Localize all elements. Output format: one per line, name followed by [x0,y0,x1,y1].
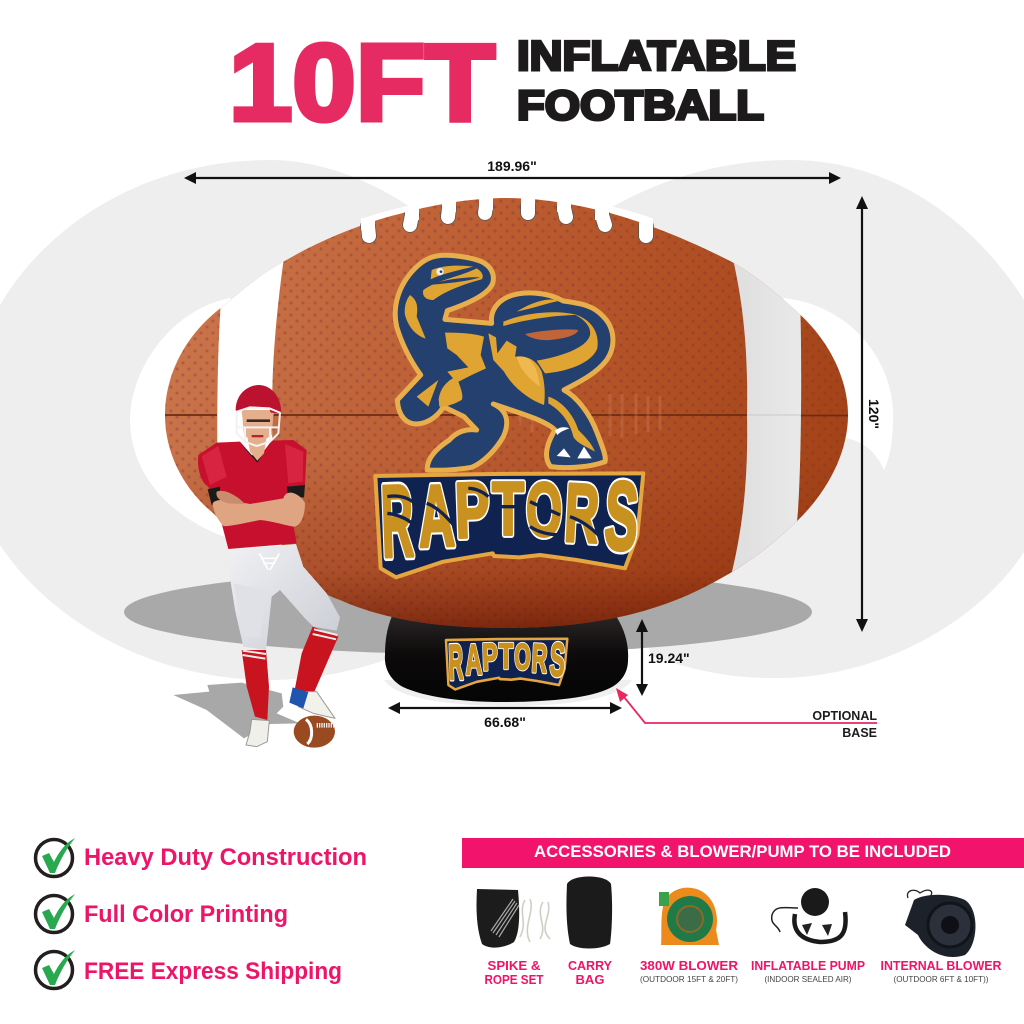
label: carry bag [568,958,612,987]
label: spike and rope set [484,958,544,987]
inflatable base [384,616,632,706]
base logo letter outlines: S [549,633,566,686]
base logo letter outlines: R [531,635,548,681]
label: internal blower: INTERNAL BLOWER [880,958,1002,973]
tail markings [537,314,598,373]
neck marking [405,295,426,339]
accessories header [462,838,1024,868]
accessories header: ACCESSORIES & BLOWER/PUMP TO BE INCLUDED [534,842,951,861]
feature list [36,838,367,988]
base logo letter outlines: P [481,635,498,679]
player shadow [173,683,300,738]
panel: accessories [462,838,1024,987]
label: carry bag: BAG [576,972,604,987]
dimension: height 120 [856,196,882,632]
callout: optional base [616,688,877,740]
icon: spike and rope set [477,889,550,948]
wordmark stripes [387,488,598,535]
football player [173,385,340,748]
label: inflatable pump: (INDOOR SEALED AIR) [764,974,852,984]
dinosaur silhouette [395,255,613,470]
thigh marking [488,333,545,405]
logo: raptor mascot [395,255,613,470]
dimension: height 120: 120" [866,399,882,429]
callout: optional base: OPTIONAL [812,709,877,723]
hind leg marking [548,397,595,452]
face mask [237,407,280,446]
feature: full color [36,894,288,932]
label: internal blower [880,958,1002,984]
wordmark letter fills: S [602,463,641,571]
label: 380W blower: 380W BLOWER [640,958,739,973]
inflatable football [160,195,855,635]
base logo letter fills: O [514,637,531,678]
callout: optional base: BASE [842,726,877,740]
title [229,22,796,144]
feature: full color: Full Color Printing [84,901,288,928]
background blobs [0,160,1024,680]
dimension: width 189.96 [184,158,841,184]
sleeves bands [208,485,305,505]
dimension: width 189.96: 189.96" [487,158,537,174]
title: inflatable: INFLATABLE [517,32,796,79]
label: inflatable pump: INFLATABLE PUMP [751,958,865,973]
base logo letter fills: R [531,635,548,681]
laces [368,198,646,236]
wordmark letter fills [379,463,641,579]
wordmark letter fills: P [454,467,491,555]
wordmark letter outlines: A [417,468,456,566]
wordmark letter outlines [379,463,641,579]
wordmark letter outlines: R [562,467,601,561]
feature: heavy duty [36,838,367,876]
ground shadow [124,570,812,654]
head [242,410,274,445]
wordmark letter outlines: O [526,469,562,553]
wordmark letter fills: R [562,467,601,561]
head markings [423,268,483,300]
base logo letter outlines: T [499,635,513,677]
dimension: base width 66.68 [388,702,622,730]
base logo letter fills [448,633,566,691]
base logo letter fills: R [448,636,464,691]
feature: heavy duty: Heavy Duty Construction [84,844,367,871]
crossed arms [213,493,305,527]
wordmark letter outlines: T [492,466,524,551]
wordmark letter outlines: P [454,467,491,555]
label: carry bag: CARRY [568,958,612,973]
pants [229,544,340,650]
label: inflatable pump [751,958,865,984]
base logo [446,633,567,691]
wordmark letter fills: R [379,463,415,579]
icon: internal blower [905,890,976,957]
socks [242,650,269,720]
chest marking [445,333,486,383]
base logo letter outlines [448,633,566,691]
feature: free shipping [36,950,342,988]
label: spike and rope set: ROPE SET [484,972,544,987]
base logo letter fills: S [549,633,566,686]
label: spike and rope set: SPIKE & [488,958,540,973]
seam [165,414,848,416]
title: football: FOOTBALL [517,82,764,128]
label: internal blower: (OUTDOOR 6FT & 10FT)) [894,974,989,984]
dimension: base width 66.68: 66.68" [484,714,526,730]
helmet [236,385,281,413]
wordmark letter outlines: R [379,463,415,579]
wordmark letter fills: O [526,469,562,553]
icon: inflatable pump [772,888,846,942]
dimension: base height 19.24: 19.24" [648,650,690,666]
icon: carry bag [566,876,612,948]
logo: RAPTORS wordmark [375,463,643,579]
small football [294,716,335,748]
base logo letter fills: P [481,635,498,679]
right stripe [730,255,801,580]
base logo letter fills: A [465,636,483,684]
label: 380W blower [640,958,739,984]
label: 380W blower: (OUTDOOR 15FT & 20FT) [640,974,738,984]
feature: free shipping: FREE Express Shipping [84,958,342,985]
base logo letter outlines: R [448,636,464,691]
base logo letter fills: T [499,635,513,677]
claws [555,427,592,458]
base logo letter outlines: A [465,636,483,684]
wordmark letter fills: A [417,468,456,566]
icon: 380W blower [659,888,719,945]
wordmark letter outlines: S [602,463,641,571]
base logo letter outlines: O [514,637,531,678]
wordmark letter fills: T [492,466,524,551]
ball body [160,195,855,635]
cleats [246,719,269,747]
jersey [198,440,307,549]
left stripe [217,262,284,548]
dimension: base height 19.24 [636,619,690,696]
title: 10FT: 10FT [229,22,495,144]
